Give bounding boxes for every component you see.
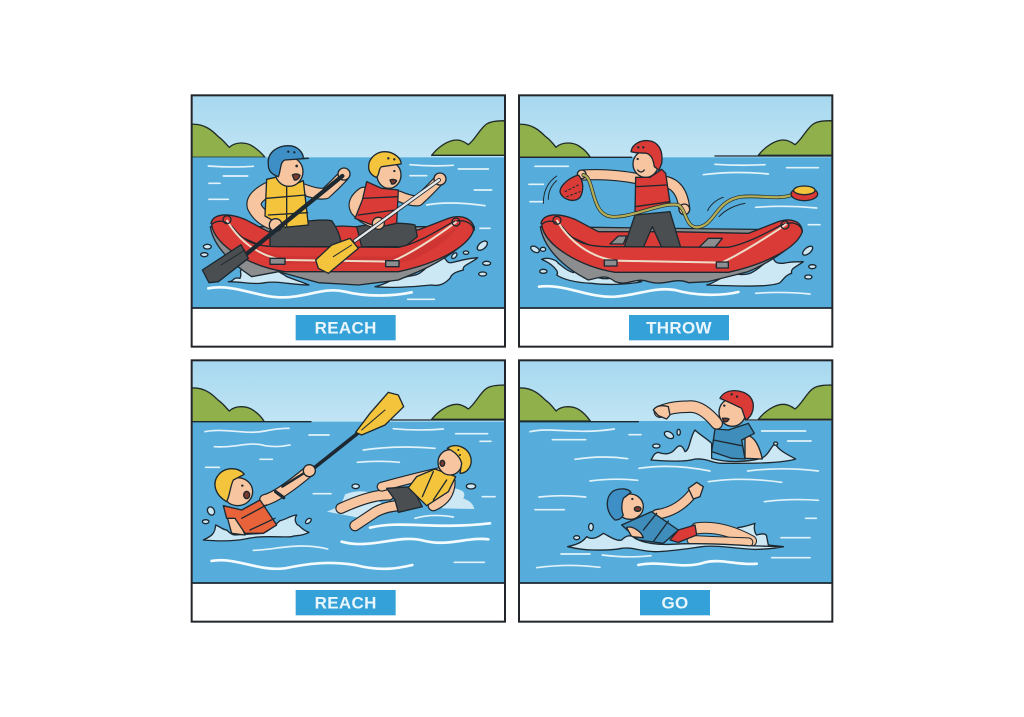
panel: reach with paddle — [192, 360, 505, 622]
water ripples — [530, 429, 818, 568]
splashes — [530, 245, 816, 286]
frame — [519, 360, 832, 622]
sky — [192, 360, 505, 424]
hills — [192, 385, 505, 422]
raft seats — [610, 236, 722, 247]
water ripples — [205, 428, 495, 569]
white caption area — [519, 583, 832, 622]
water — [192, 422, 505, 583]
hills — [192, 121, 505, 157]
white caption area — [519, 308, 832, 347]
water — [192, 157, 505, 308]
frame — [192, 360, 505, 622]
frame — [192, 95, 505, 347]
sky — [519, 95, 832, 159]
water ripples — [208, 165, 492, 299]
water — [519, 157, 832, 308]
label: reach: REACH — [315, 594, 377, 613]
raft hull — [210, 227, 474, 285]
raft hull — [540, 227, 802, 283]
label: go: GO — [661, 594, 689, 613]
label: reach — [296, 315, 396, 340]
label: throw: THROW — [646, 319, 713, 338]
hills — [519, 121, 832, 157]
sky — [192, 95, 505, 159]
dark paddle — [202, 176, 342, 283]
white caption area — [192, 583, 505, 622]
white caption area — [192, 308, 505, 347]
person: blue helmet — [254, 146, 350, 247]
rope bag — [560, 175, 583, 200]
frame — [519, 95, 832, 347]
throw bag float — [791, 186, 818, 201]
person throwing rope bag — [577, 141, 690, 247]
sky — [519, 360, 832, 424]
person in water with paddle — [202, 465, 315, 541]
raft interior — [541, 215, 802, 257]
person floating on back — [327, 446, 476, 526]
label: reach — [296, 590, 396, 615]
splashes — [201, 239, 491, 287]
raft front tube — [212, 216, 474, 272]
motion lines — [543, 176, 745, 217]
paddle — [280, 392, 404, 495]
label: reach: REACH — [315, 319, 377, 338]
raft front tube — [542, 216, 802, 272]
panel: throw — [519, 95, 832, 347]
water ripples — [529, 164, 820, 297]
hills — [519, 385, 832, 421]
label: go — [640, 590, 710, 615]
swimmer with red helmet — [651, 391, 796, 463]
raft interior — [211, 215, 474, 257]
water — [519, 421, 832, 583]
panel: reach from raft — [192, 95, 505, 347]
rope — [583, 175, 792, 227]
panel: go — [519, 360, 832, 622]
person: yellow helmet — [355, 152, 446, 247]
swimmer with blue helmet — [568, 482, 783, 552]
label: throw — [629, 315, 729, 340]
yellow paddle — [316, 180, 439, 273]
